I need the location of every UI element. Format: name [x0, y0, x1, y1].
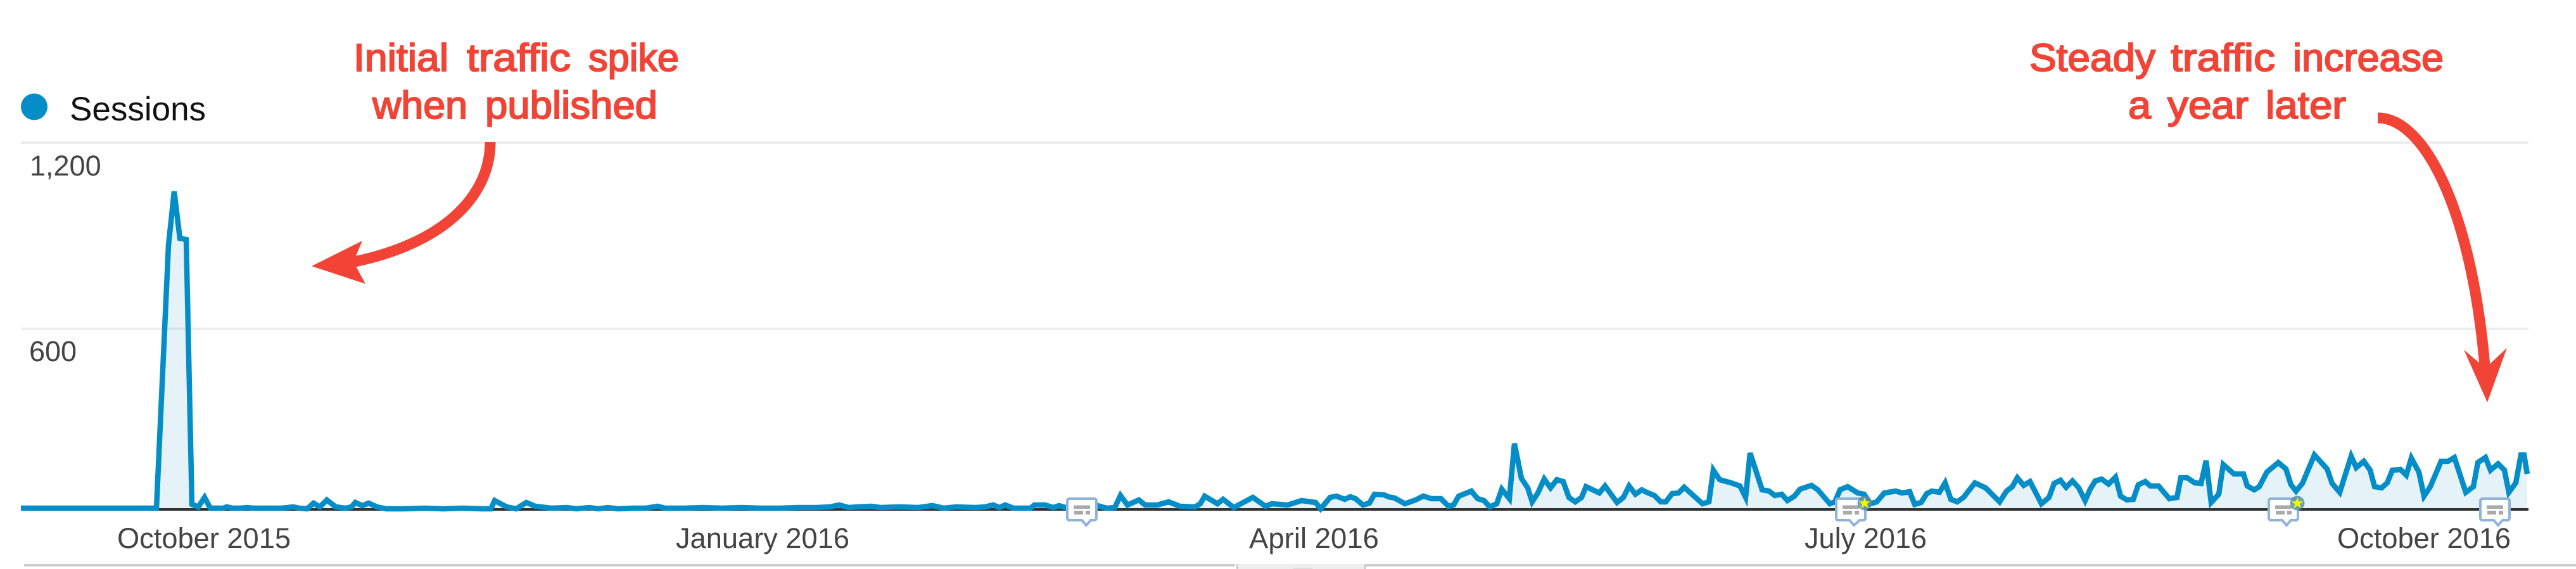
callout: Initial traffic spike when published: published — [485, 84, 657, 127]
icon: annotation bubble 4 — [2480, 499, 2509, 525]
callout: Steady traffic increase a year later: a — [2128, 84, 2151, 127]
x axis label October 2015: October 2015 — [117, 522, 291, 554]
y axis label 1,200: 1,200 — [30, 150, 101, 182]
callout: Initial traffic spike when published: Initial — [353, 36, 448, 79]
callout: Initial traffic spike when published: spike — [588, 36, 679, 79]
chart: sessions over time — [21, 141, 2528, 554]
x axis label April 2016: April 2016 — [1249, 522, 1379, 554]
arrow: points to steady traffic — [2378, 118, 2507, 402]
callout: Steady traffic increase a year later: year — [2167, 84, 2249, 127]
x axis label January 2016: January 2016 — [676, 522, 849, 554]
icon: star marker 2 — [2290, 495, 2304, 511]
callout: Steady traffic increase a year later: Steady — [2029, 36, 2156, 79]
scrollbar track at bottom — [24, 564, 2576, 569]
callout: Initial traffic spike when published — [353, 36, 679, 127]
callout: Steady traffic increase a year later: traffic — [2171, 36, 2275, 79]
x axis label July 2016: July 2016 — [1805, 522, 1927, 554]
icon: star marker 1 — [1857, 495, 1872, 511]
icon: annotation bubble 2 — [1836, 499, 1865, 525]
x axis label October 2016: October 2016 — [2337, 522, 2511, 554]
callout: Initial traffic spike when published: traffic — [467, 36, 571, 79]
sessions line — [21, 191, 2527, 509]
callout: Steady traffic increase a year later: increase — [2293, 36, 2444, 79]
icon: annotation bubble 3 — [2269, 499, 2298, 525]
callout: Steady traffic increase a year later — [2029, 36, 2444, 127]
arrow: points to initial spike — [312, 142, 490, 284]
callout: Steady traffic increase a year later: later — [2266, 84, 2346, 127]
icon: annotation bubble 1 — [1067, 499, 1096, 525]
callout: Initial traffic spike when published: when — [372, 84, 467, 127]
legend: Sessions: Sessions — [70, 91, 206, 128]
area fill under the line — [156, 191, 2527, 509]
y axis label 600: 600 — [29, 335, 77, 368]
